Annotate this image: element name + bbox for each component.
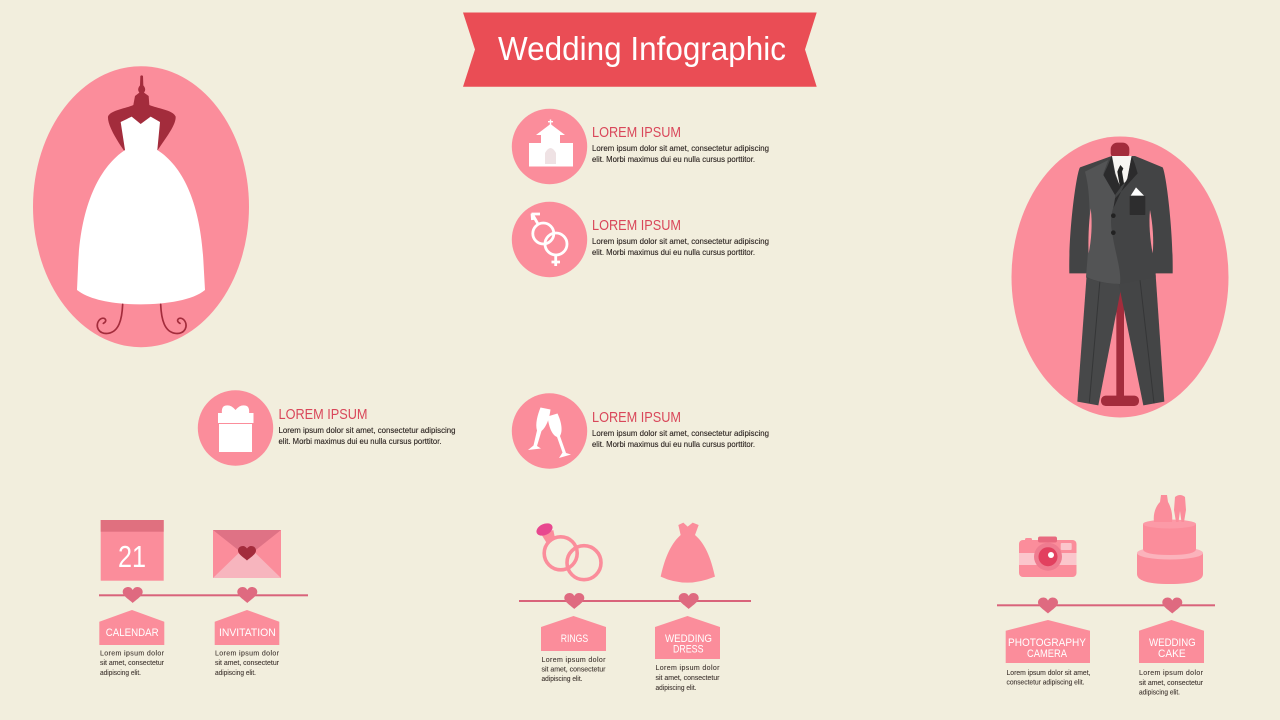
text: rings description: Lorem ipsum dolor: [542, 657, 606, 664]
text: calendar description: [100, 650, 165, 677]
item: champagne: LOREM IPSUM: [592, 409, 681, 426]
text: rings description: adipiscing elit.: [542, 676, 583, 683]
icon: wedding cake: [1137, 495, 1203, 584]
icon: calendar: 21: [118, 539, 146, 574]
item: gift: elit. Morbi maximus dui eu nulla cursus porttitor.: [278, 437, 442, 446]
label: rings: RINGS: [561, 633, 588, 645]
text: calendar description: sit amet, consectetur: [100, 660, 165, 667]
item: gift: LOREM IPSUM: [278, 406, 368, 423]
label: rings: [541, 616, 606, 651]
item: champagne: [512, 393, 769, 469]
icon: heart marker: [1038, 598, 1058, 614]
icon: gift box: [198, 390, 273, 466]
text: wedding dress description: adipiscing elit.: [656, 685, 697, 692]
text: cake description: [1139, 670, 1204, 696]
icon: wedding rings: [534, 521, 601, 580]
icon: camera: [1019, 536, 1076, 577]
timeline: calendar and invitation: [99, 520, 308, 677]
item: gift: [198, 390, 456, 466]
label: wedding cake: [1139, 620, 1204, 663]
icon: champagne glasses: [512, 393, 587, 469]
text: rings description: sit amet, consectetur: [542, 666, 606, 674]
icon: heart marker: [679, 593, 699, 609]
timeline: camera and cake: [997, 495, 1215, 696]
label: calendar: [99, 610, 164, 645]
label: invitation: INVITATION: [219, 627, 276, 639]
item: church: LOREM IPSUM: [592, 124, 681, 141]
title banner: [463, 12, 817, 87]
text: calendar description: adipiscing elit.: [100, 670, 141, 677]
icon: heart marker: [123, 587, 143, 603]
item: gender rings: Lorem ipsum dolor sit amet, consectetur adipiscing: [592, 237, 769, 246]
icon: heart marker: [1162, 598, 1182, 614]
label: photography camera: CAMERA: [1027, 648, 1068, 660]
item: champagne: Lorem ipsum dolor sit amet, consectetur adipiscing: [592, 429, 769, 438]
text: invitation description: Lorem ipsum dolor: [215, 650, 280, 658]
text: invitation description: adipiscing elit.: [215, 670, 256, 677]
text: camera description: [1006, 670, 1091, 686]
item: church: elit. Morbi maximus dui eu nulla cursus porttitor.: [592, 155, 755, 164]
title banner: Wedding Infographic: [498, 30, 786, 67]
icon: envelope: [213, 530, 281, 578]
text: calendar description: Lorem ipsum dolor: [100, 650, 165, 658]
item: gender rings: [512, 202, 769, 277]
text: wedding dress description: sit amet, consectetur: [656, 675, 720, 682]
text: camera description: Lorem ipsum dolor sit amet,: [1006, 670, 1091, 677]
label: wedding dress: [655, 616, 720, 659]
label: wedding cake: WEDDING: [1149, 637, 1196, 649]
icon: interlocked male and female symbols: [512, 202, 587, 277]
label: wedding cake: CAKE: [1158, 648, 1186, 660]
timeline: rings and wedding dress: [519, 521, 751, 692]
label: invitation: [215, 610, 279, 645]
item: gift: Lorem ipsum dolor sit amet, consectetur adipiscing: [278, 426, 456, 435]
label: photography camera: PHOTOGRAPHY: [1008, 637, 1087, 649]
icon: heart marker: [237, 587, 257, 603]
item: gender rings: LOREM IPSUM: [592, 217, 681, 234]
item: church: [512, 109, 769, 184]
icon: calendar: [101, 520, 164, 581]
text: invitation description: [215, 650, 280, 677]
label: wedding dress: WEDDING: [665, 633, 712, 645]
text: rings description: [542, 657, 606, 683]
icon: dress: [661, 523, 715, 583]
text: wedding dress description: Lorem ipsum dolor: [656, 665, 720, 672]
label: photography camera: [1006, 620, 1090, 663]
item: church: Lorem ipsum dolor sit amet, consectetur adipiscing: [592, 144, 769, 153]
panel: wedding dress on mannequin: [33, 66, 249, 347]
text: invitation description: sit amet, consectetur: [215, 660, 280, 667]
icon: heart marker: [564, 593, 584, 609]
item: champagne: elit. Morbi maximus dui eu nulla cursus porttitor.: [592, 440, 755, 449]
text: camera description: consectetur adipiscing elit.: [1006, 680, 1085, 686]
icon: church: [512, 109, 587, 184]
label: wedding dress: DRESS: [673, 644, 704, 656]
text: cake description: adipiscing elit.: [1139, 690, 1180, 696]
label: calendar: CALENDAR: [106, 627, 159, 639]
text: cake description: Lorem ipsum dolor: [1139, 670, 1204, 677]
text: wedding dress description: [656, 665, 720, 692]
panel: groom suit on stand: [1012, 136, 1228, 418]
text: cake description: sit amet, consectetur: [1139, 680, 1204, 687]
item: gender rings: elit. Morbi maximus dui eu nulla cursus porttitor.: [592, 248, 755, 257]
